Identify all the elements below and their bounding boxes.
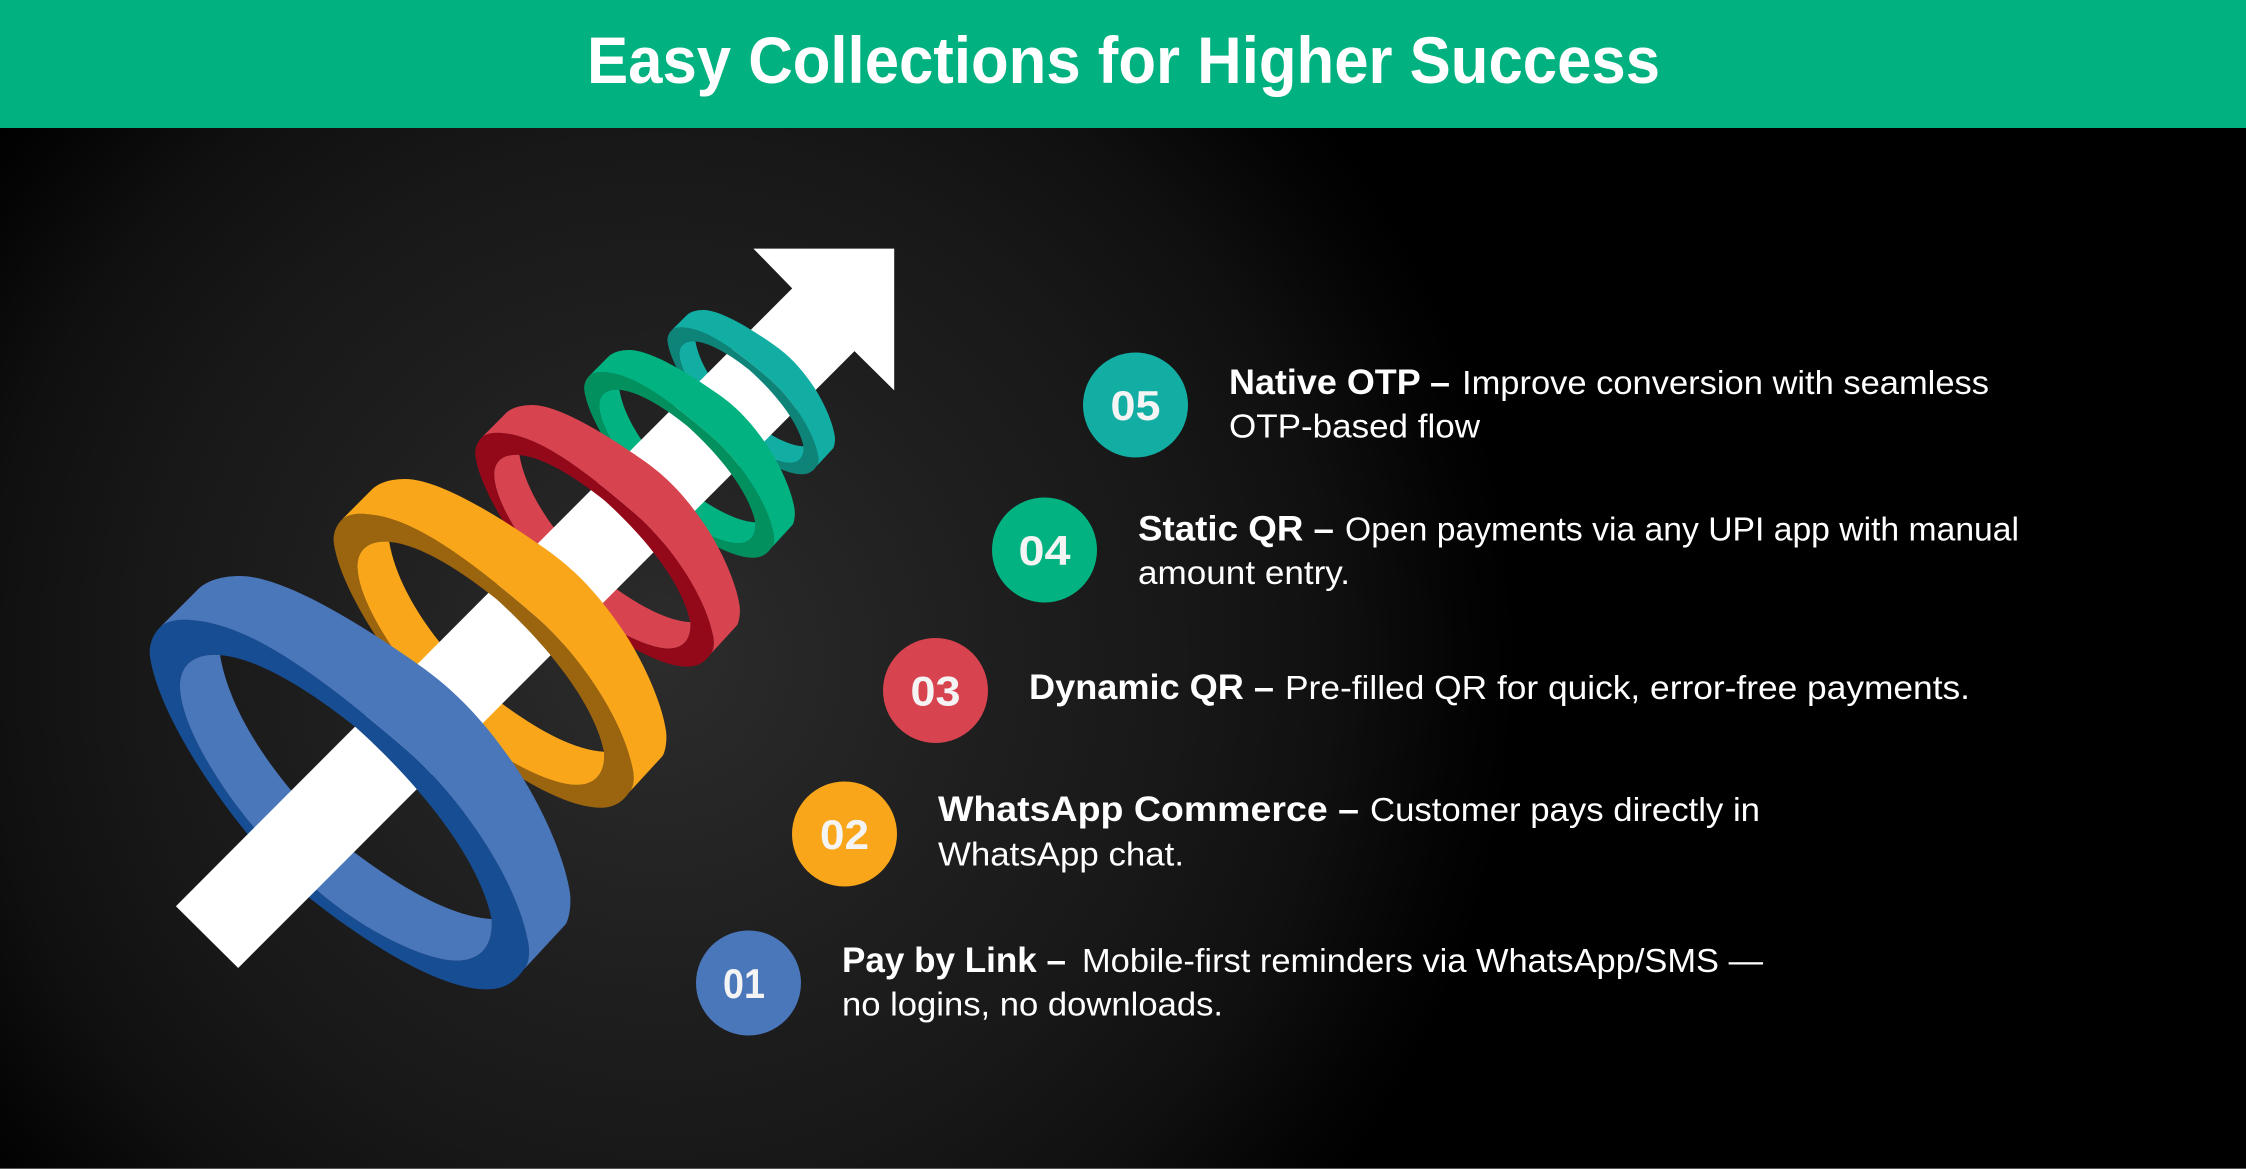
white arrow bbox=[176, 249, 894, 968]
item 03: Dynamic QR bbox=[883, 638, 1970, 743]
text 03: Pre-filled QR for quick, error-free payments. bbox=[1285, 669, 1970, 706]
text 01: no logins, no downloads. bbox=[842, 986, 1223, 1022]
text 02: WhatsApp Commerce – bbox=[938, 790, 1359, 829]
ring front: blue bbox=[161, 576, 570, 970]
text 04: Open payments via any UPI app with manual bbox=[1345, 510, 2019, 548]
text 05: Native OTP – bbox=[1229, 363, 1450, 402]
text 01: Mobile-first reminders via WhatsApp/SMS — bbox=[1082, 942, 1763, 979]
ring front: orange bbox=[342, 479, 666, 792]
text 01: Pay by Link – bbox=[842, 941, 1066, 980]
text 02: Customer pays directly in bbox=[1370, 791, 1760, 828]
ring front: green bbox=[590, 350, 795, 548]
badge 04 bbox=[992, 498, 1097, 602]
ring back: teal bbox=[667, 327, 818, 474]
text 03: Dynamic QR – bbox=[1029, 668, 1274, 707]
item 01: Pay by Link bbox=[696, 930, 1763, 1036]
ring front: teal bbox=[672, 310, 835, 467]
badge 05: 05 bbox=[1110, 382, 1160, 429]
text 02 bbox=[938, 790, 1760, 872]
item 02: WhatsApp Commerce bbox=[792, 782, 1760, 886]
text 05: OTP-based flow bbox=[1229, 408, 1480, 444]
illustration: arrow through five rings bbox=[150, 249, 894, 989]
text 05 bbox=[1229, 363, 1989, 444]
text 04 bbox=[1138, 510, 2019, 591]
badge 03: 03 bbox=[910, 668, 960, 714]
text 02: WhatsApp chat. bbox=[938, 836, 1184, 872]
ring back: orange bbox=[334, 514, 634, 808]
text 03 bbox=[1029, 668, 1970, 707]
text 04: Static QR – bbox=[1138, 510, 1334, 548]
ring back: green bbox=[584, 372, 774, 558]
text 01 bbox=[842, 941, 1763, 1022]
badge 01 bbox=[696, 930, 801, 1036]
badge 05 bbox=[1083, 352, 1188, 458]
item 04: Static QR bbox=[992, 498, 2019, 602]
text 04: amount entry. bbox=[1138, 554, 1350, 591]
badge 01: 01 bbox=[723, 960, 765, 1007]
badge 03 bbox=[883, 638, 988, 743]
title: Easy Collections for Higher Success bbox=[587, 23, 1660, 97]
text 05: Improve conversion with seamless bbox=[1462, 364, 1989, 401]
ring back: red bbox=[475, 433, 714, 667]
badge 02: 02 bbox=[820, 811, 869, 858]
ring back: blue bbox=[150, 620, 529, 989]
ring front: red bbox=[482, 405, 740, 654]
item 05: Native OTP bbox=[1083, 352, 1989, 458]
badge 02 bbox=[792, 782, 897, 886]
badge 04: 04 bbox=[1018, 527, 1071, 574]
header bar bbox=[0, 0, 2246, 128]
